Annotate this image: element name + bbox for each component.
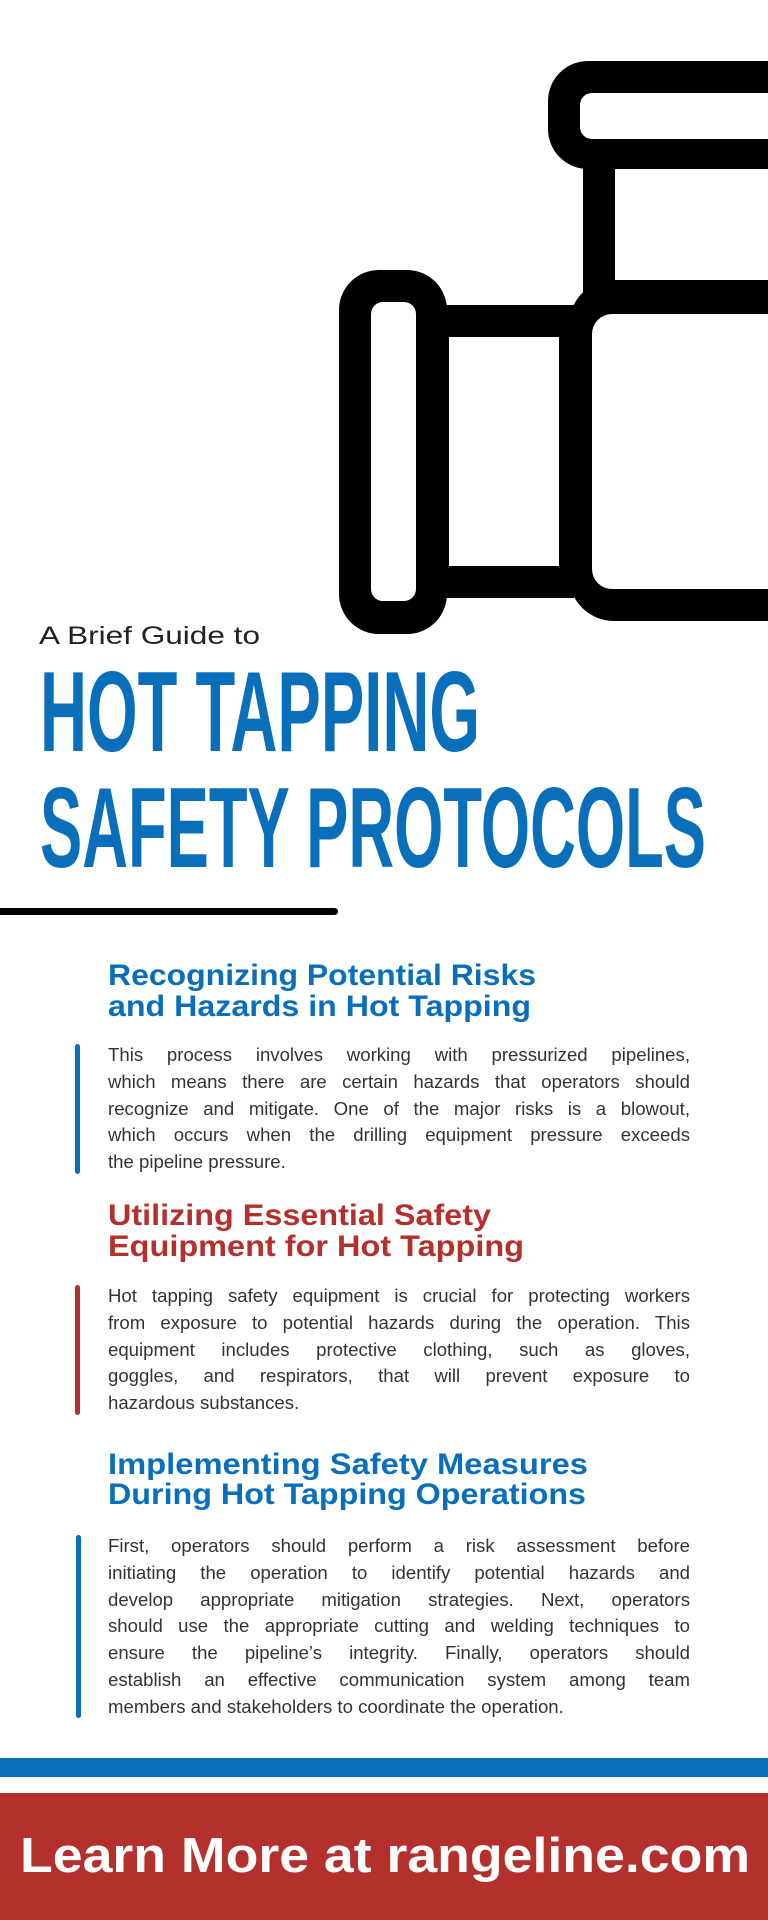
accent bar: measures: [76, 1535, 81, 1718]
heading: risks: Recognizing Potential Risks: [108, 959, 536, 992]
heading: risks: and Hazards in Hot Tapping: [108, 990, 531, 1023]
accent bar: equipment: [75, 1285, 80, 1415]
title: [40, 649, 706, 892]
text: measures: members and stakeholders to coordinate the operation.: [108, 1696, 564, 1717]
heading: measures: [108, 1448, 588, 1511]
heading: measures: During Hot Tapping Operations: [108, 1478, 586, 1511]
text: equipment: hazardous substances.: [108, 1392, 299, 1413]
text: measures: develop appropriate mitigation strategies. Next, operators: [108, 1589, 690, 1610]
footer banner: [0, 1793, 768, 1920]
heading: equipment: Equipment for Hot Tapping: [108, 1230, 524, 1263]
text: equipment: goggles, and respirators, that will prevent exposure to: [108, 1365, 690, 1386]
text: risks: which means there are certain hazards that operators should: [108, 1071, 690, 1092]
text: measures: establish an effective communication system among team: [108, 1669, 690, 1690]
text: risks: This process involves working with pressurized pipelines,: [108, 1044, 690, 1065]
heading: equipment: Utilizing Essential Safety: [108, 1199, 491, 1232]
accent bar: risks: [75, 1044, 80, 1174]
text: risks: which occurs when the drilling equipment pressure exceeds: [108, 1124, 690, 1145]
black underline: [0, 908, 338, 915]
icon: pipe fitting: [339, 61, 768, 634]
text: equipment: Hot tapping safety equipment is crucial for protecting workers: [108, 1285, 690, 1306]
subtitle: A Brief Guide to: [39, 622, 260, 650]
text: equipment: from exposure to potential hazards during the operation. This: [108, 1312, 690, 1333]
footer banner: Learn More at rangeline.com: [20, 1829, 750, 1883]
text: risks: [108, 1044, 690, 1172]
text: equipment: [108, 1285, 690, 1413]
text: measures: initiating the operation to identify potential hazards and: [108, 1562, 690, 1583]
blue stripe: [0, 1758, 768, 1777]
text: measures: [108, 1535, 690, 1717]
heading: risks: [108, 959, 536, 1023]
text: risks: the pipeline pressure.: [108, 1151, 286, 1172]
text: measures: First, operators should perform a risk assessment before: [108, 1535, 690, 1556]
text: risks: recognize and mitigate. One of the major risks is a blowout,: [108, 1098, 690, 1119]
heading: equipment: [108, 1199, 524, 1263]
text: measures: ensure the pipeline’s integrity. Finally, operators should: [108, 1642, 690, 1663]
text: equipment: equipment includes protective clothing, such as gloves,: [108, 1339, 690, 1360]
text: measures: should use the appropriate cutting and welding techniques to: [108, 1615, 690, 1636]
heading: measures: Implementing Safety Measures: [108, 1448, 588, 1481]
